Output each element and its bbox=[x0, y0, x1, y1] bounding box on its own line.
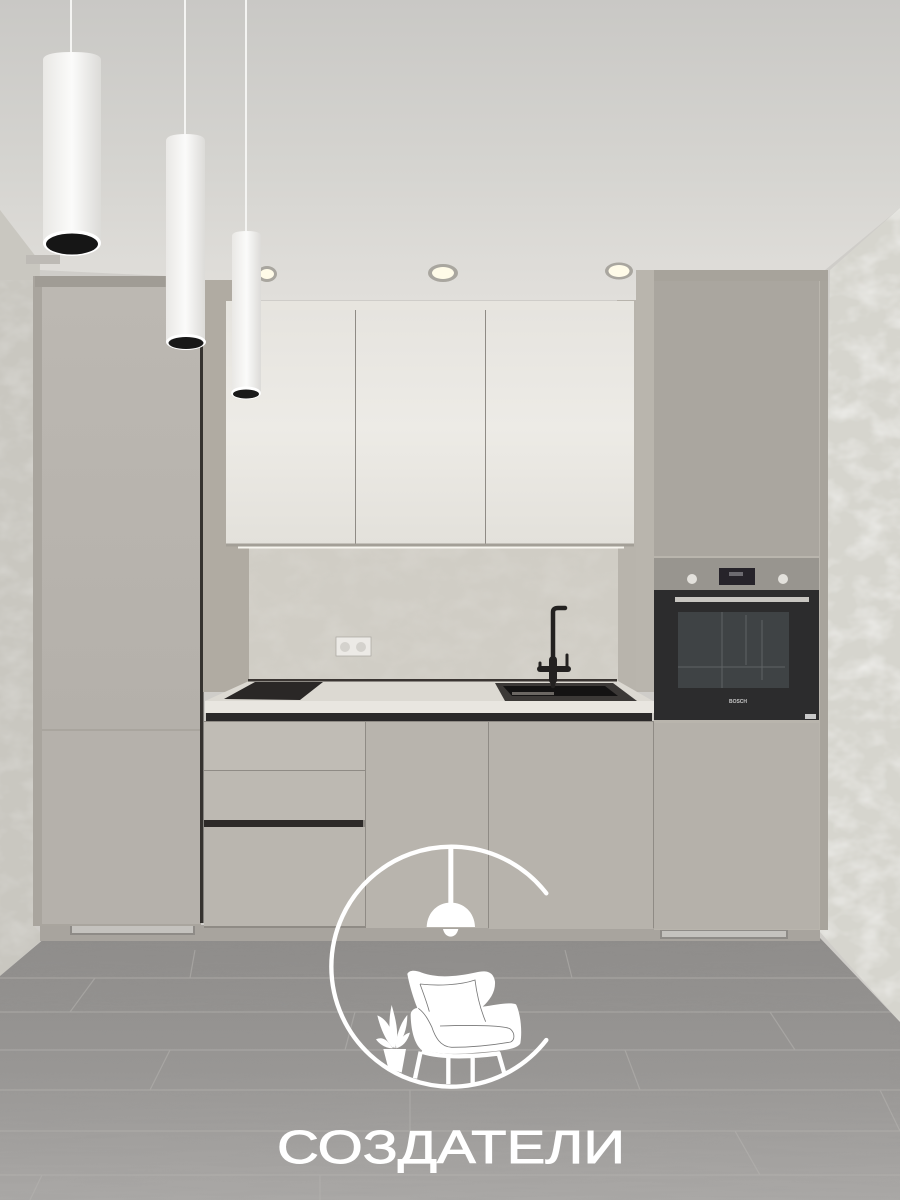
lower door bbox=[654, 723, 819, 929]
ceiling bbox=[0, 0, 900, 300]
brand name: СОЗДАТЕЛИ bbox=[277, 1121, 625, 1173]
pendant lamp 3 bbox=[231, 0, 261, 400]
logo armchair bbox=[407, 971, 521, 1084]
upper door bbox=[654, 281, 819, 556]
logo lamp bbox=[427, 847, 475, 937]
niche wall left bbox=[203, 280, 249, 692]
right wall bbox=[820, 208, 900, 1023]
left wall bbox=[0, 210, 60, 980]
cooktop bbox=[224, 682, 323, 700]
backsplash bbox=[249, 546, 618, 681]
drawer 3 bbox=[204, 827, 365, 926]
upper cabinets bbox=[226, 301, 634, 548]
logo bbox=[331, 847, 546, 1087]
right tall cabinet bbox=[636, 270, 828, 930]
door bbox=[489, 722, 653, 929]
worktop bbox=[205, 679, 654, 721]
vent: right bbox=[660, 929, 788, 939]
floor bbox=[0, 938, 900, 1200]
oven: BOSCH bbox=[729, 699, 747, 705]
sink bbox=[495, 683, 637, 701]
drawer 2 bbox=[204, 771, 365, 820]
faucet bbox=[540, 608, 568, 686]
socket bbox=[336, 637, 371, 656]
lower cabinets bbox=[204, 721, 654, 929]
door bbox=[366, 722, 488, 928]
door 3 bbox=[486, 310, 634, 544]
pendant lamp 1 bbox=[43, 0, 101, 256]
fridge door bbox=[42, 287, 200, 729]
logo ring bbox=[331, 847, 546, 1087]
niche wall right bbox=[617, 300, 655, 692]
door 1 bbox=[226, 310, 355, 544]
plinth bbox=[40, 925, 820, 941]
oven bbox=[654, 558, 819, 720]
ceiling spotlights bbox=[257, 262, 633, 282]
door 2 bbox=[356, 310, 485, 544]
logo plant bbox=[376, 1005, 410, 1073]
vent: left bbox=[70, 924, 195, 935]
pendant lamp 2 bbox=[166, 0, 206, 350]
left tall cabinet bbox=[33, 276, 204, 926]
drawer 1 bbox=[204, 722, 365, 770]
freezer door bbox=[42, 731, 200, 924]
